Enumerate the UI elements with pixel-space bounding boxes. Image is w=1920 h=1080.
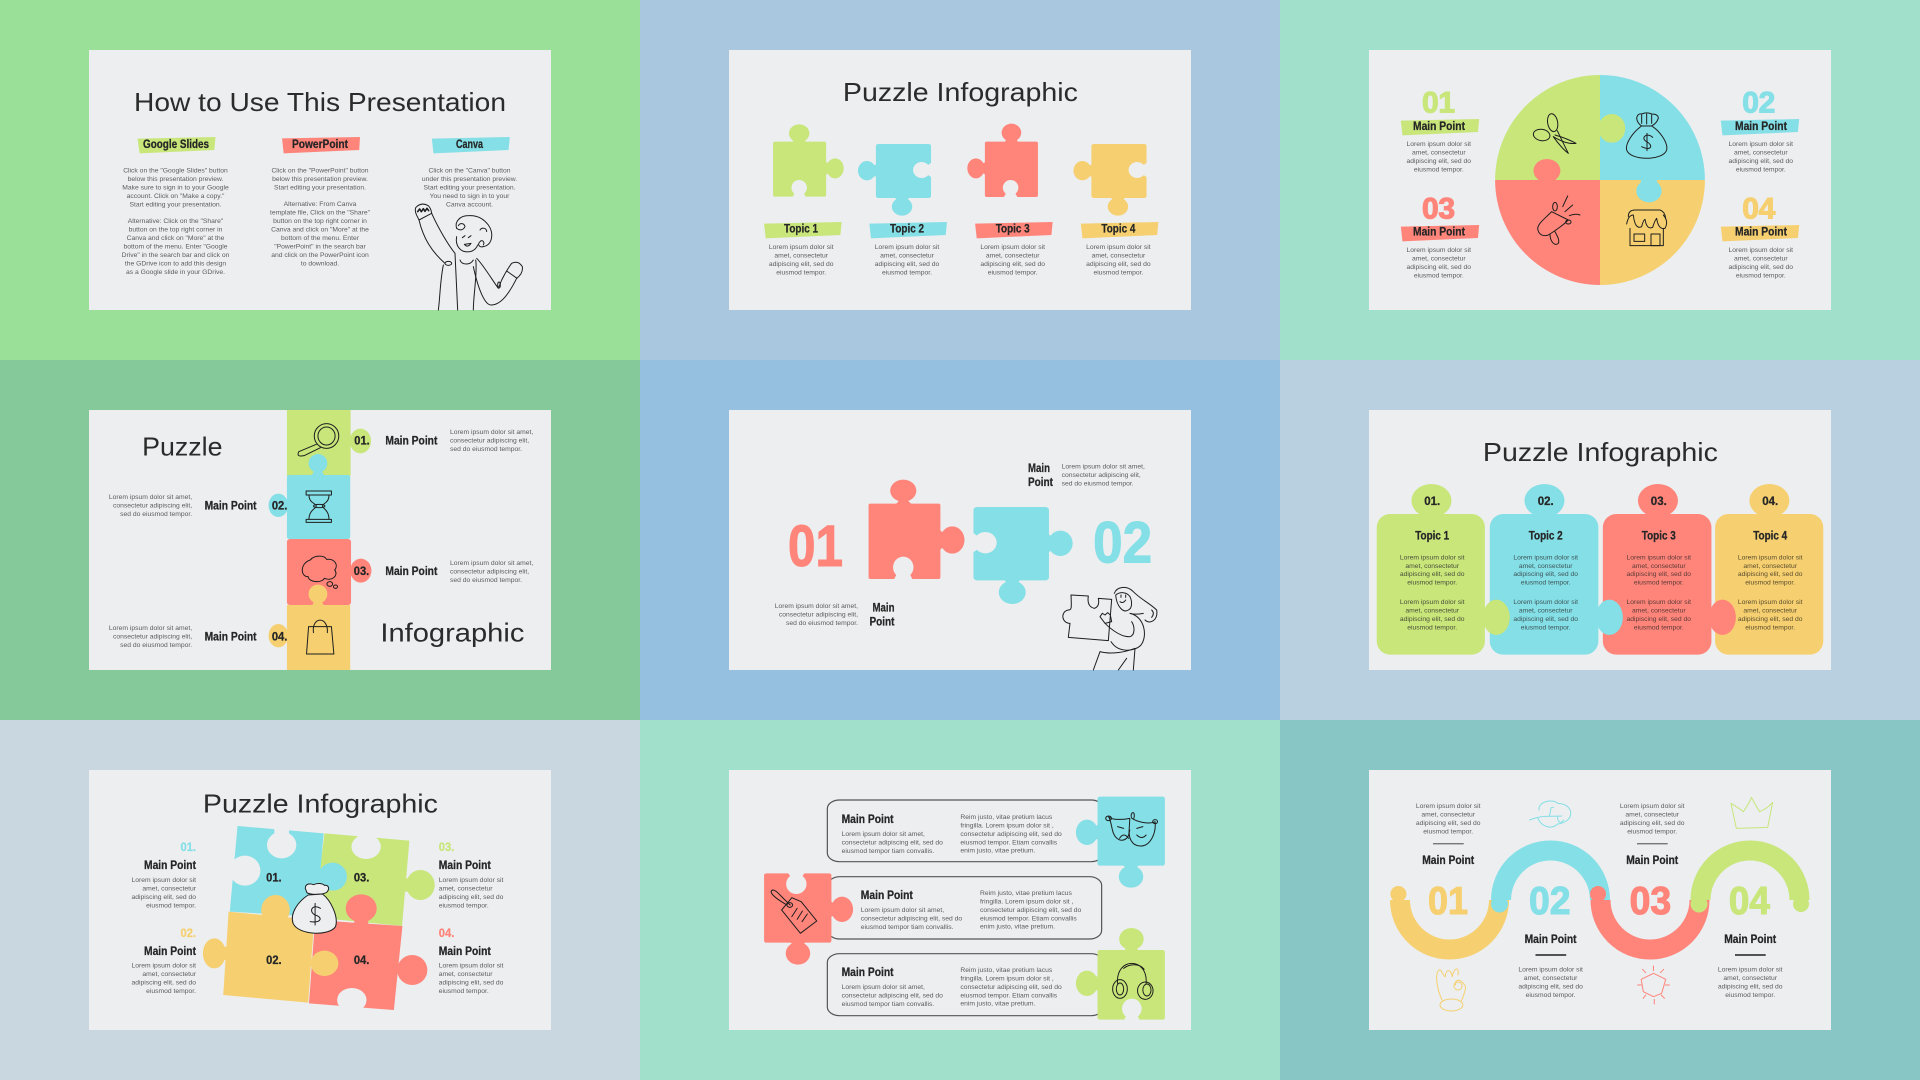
text: card 2: Lorem ipsum dolor sit bbox=[1513, 599, 1578, 606]
text: row 3 left: Lorem ipsum dolor sit amet, bbox=[842, 984, 925, 991]
text: point 3: amet, consectetur bbox=[1625, 811, 1680, 818]
text: right top: amet, consectetur bbox=[439, 886, 493, 893]
text: left top: Lorem ipsum dolor sit bbox=[131, 877, 196, 884]
text: card 1: adipiscing elit, sed do bbox=[1400, 616, 1465, 623]
text: powerpoint instructions: button on the top right corner in bbox=[273, 218, 367, 225]
label: main point 2: Main Point bbox=[205, 500, 257, 512]
text: point 4: eiusmod tempor. bbox=[1736, 273, 1786, 280]
text: card 4: amet, consectetur bbox=[1743, 563, 1798, 570]
label: main point row 3: Main Point bbox=[842, 967, 894, 979]
label: main point right top: Main Point bbox=[439, 860, 491, 872]
outlined cards with puzzle pieces bbox=[764, 797, 1165, 1020]
text: row 2 right: eiusmod tempor. Etiam convallis bbox=[980, 915, 1077, 922]
text: point 2: consectetur adipiscing elit, bbox=[113, 503, 192, 510]
text: google slides instructions: Click on the "Google Slides" button bbox=[123, 168, 228, 174]
text: point 1: amet, consectetur bbox=[1412, 150, 1466, 157]
number 03: 03 bbox=[1630, 880, 1671, 923]
text: card 4: eiusmod tempor. bbox=[1745, 580, 1795, 587]
text: left bottom: amet, consectetur bbox=[142, 971, 197, 978]
text: right top: eiusmod tempor. bbox=[439, 903, 489, 910]
text: point 4: Lorem ipsum dolor sit bbox=[1718, 966, 1783, 974]
label: main point right bottom: Main Point bbox=[439, 946, 491, 958]
label: google slides: Google Slides bbox=[143, 139, 209, 151]
text: card 1: Lorem ipsum dolor sit bbox=[1400, 554, 1465, 562]
text: google slides instructions: button on the top right corner in bbox=[129, 227, 223, 234]
text: bottom: consectetur adipiscing elit, bbox=[779, 611, 858, 618]
text: point 1: consectetur adipiscing elit, bbox=[450, 437, 529, 444]
text: google slides instructions: below this presentation preview. bbox=[128, 176, 223, 183]
label: topic 4: Topic 4 bbox=[1101, 224, 1136, 236]
text: card 4: amet, consectetur bbox=[1743, 608, 1798, 615]
text: point 2: sed do eiusmod tempor. bbox=[120, 511, 192, 518]
panel: four puzzle pieces topics bbox=[640, 0, 1280, 360]
vertical puzzle with icons bbox=[269, 410, 371, 670]
number 01: 01 bbox=[1428, 880, 1468, 923]
text: card 2: Lorem ipsum dolor sit bbox=[1513, 554, 1578, 562]
label: piece 02.: 02. bbox=[266, 955, 282, 967]
text: point 2: Lorem ipsum dolor sit bbox=[1518, 966, 1583, 974]
text: topic 1: eiusmod tempor. bbox=[776, 269, 826, 276]
text: row 2 left: eiusmod tempor tiam convallis. bbox=[861, 924, 954, 931]
title: Puzzle Infographic bbox=[203, 789, 438, 819]
text: card 1: eiusmod tempor. bbox=[1407, 580, 1457, 587]
panel: outlined rows bbox=[640, 720, 1280, 1080]
text: right bottom: Lorem ipsum dolor sit bbox=[439, 962, 503, 970]
label: main point 4: Main Point bbox=[1735, 226, 1787, 238]
panel: tilted jigsaw bbox=[0, 720, 640, 1080]
label: main point row 1: Main Point bbox=[842, 814, 894, 826]
text: row 2 right: consectetur adipiscing elit, sed do bbox=[980, 907, 1082, 914]
text: topic 4: adipiscing elit, sed do bbox=[1086, 261, 1151, 268]
label: topic 4: Topic 4 bbox=[1753, 530, 1788, 542]
cards bbox=[1377, 484, 1823, 655]
text: card 2: adipiscing elit, sed do bbox=[1513, 571, 1578, 578]
text: point 1: amet, consectetur bbox=[1421, 811, 1476, 818]
number: left 02.: 02. bbox=[180, 928, 196, 940]
text: point 3: adipiscing elit, sed do bbox=[1407, 264, 1471, 271]
text: point 3: eiusmod tempor. bbox=[1627, 828, 1677, 835]
text: google slides instructions: account. Click on "Make a copy." bbox=[127, 193, 225, 200]
title: infographic: Infographic bbox=[380, 618, 524, 648]
text: point 3: sed do eiusmod tempor. bbox=[450, 577, 522, 584]
label: main point bottom: Main bbox=[872, 602, 894, 614]
text: card 4: adipiscing elit, sed do bbox=[1738, 571, 1803, 578]
number 02.: 02. bbox=[1538, 496, 1554, 508]
number: right 03.: 03. bbox=[439, 842, 454, 854]
text: point 2: adipiscing elit, sed do bbox=[1729, 158, 1793, 165]
text: card 4: adipiscing elit, sed do bbox=[1738, 616, 1803, 623]
text: card 1: amet, consectetur bbox=[1405, 608, 1460, 615]
title: Puzzle Infographic bbox=[1483, 437, 1718, 467]
text: left top: eiusmod tempor. bbox=[146, 903, 196, 910]
text: canva instructions: Canva account. bbox=[446, 201, 493, 208]
label: piece 04.: 04. bbox=[354, 955, 369, 967]
text: canva instructions: under this presentation preview. bbox=[422, 176, 517, 183]
number: right 04.: 04. bbox=[439, 928, 454, 940]
label: main point 4: Main Point bbox=[1724, 934, 1776, 946]
text: bottom: Lorem ipsum dolor sit amet, bbox=[775, 603, 858, 610]
label: main point 1: Main Point bbox=[385, 436, 438, 448]
text: point 1: eiusmod tempor. bbox=[1423, 828, 1473, 835]
text: google slides instructions: Canva and click on "More" at the bbox=[127, 235, 225, 242]
number 04: 04 bbox=[1729, 880, 1770, 923]
text: card 3: eiusmod tempor. bbox=[1634, 624, 1684, 631]
label: piece 03.: 03. bbox=[354, 872, 369, 884]
text: row 1 right: enim justo, vitae pretium. bbox=[960, 848, 1036, 855]
text: point 2: Lorem ipsum dolor sit amet, bbox=[109, 494, 192, 501]
text: point 3: Lorem ipsum dolor sit bbox=[1620, 803, 1685, 810]
text: row 1 left: eiusmod tempor tiam convallis. bbox=[842, 848, 934, 855]
text: card 2: eiusmod tempor. bbox=[1521, 580, 1571, 587]
number 04.: 04. bbox=[1762, 496, 1778, 508]
text: point 3: eiusmod tempor. bbox=[1414, 273, 1464, 280]
label: main point row 2: Main Point bbox=[861, 890, 913, 902]
text: card 1: eiusmod tempor. bbox=[1407, 624, 1457, 631]
text: point 3: Lorem ipsum dolor sit bbox=[1407, 247, 1471, 254]
title: puzzle: Puzzle bbox=[142, 432, 222, 462]
text: point 2: eiusmod tempor. bbox=[1526, 992, 1576, 999]
text: row 1 left: consectetur adipiscing elit, sed do bbox=[842, 839, 943, 846]
illustration: person carrying puzzle piece bbox=[1063, 587, 1157, 670]
text: row 1 right: Reim justo, vitae pretium lacus bbox=[960, 814, 1053, 821]
text: google slides instructions: as a Google slide in your GDrive. bbox=[126, 269, 225, 276]
label: main point bottom: Point bbox=[870, 616, 895, 628]
number 02: 02 bbox=[1742, 87, 1775, 120]
text: topic 3: amet, consectetur bbox=[986, 252, 1040, 259]
text: topic 1: adipiscing elit, sed do bbox=[769, 261, 834, 268]
panel: circular puzzle bbox=[1280, 0, 1920, 360]
text: google slides instructions: Make sure to sign in to your Google bbox=[122, 184, 229, 191]
label: topic 2: Topic 2 bbox=[1529, 530, 1563, 542]
text: row 3 right: enim justo, vitae pretium. bbox=[960, 1001, 1036, 1008]
text: topic 2: Lorem ipsum dolor sit bbox=[875, 244, 939, 251]
text: card 4: eiusmod tempor. bbox=[1745, 624, 1795, 631]
text: left bottom: Lorem ipsum dolor sit bbox=[131, 962, 196, 970]
text: powerpoint instructions: Click on the "PowerPoint" button bbox=[271, 168, 369, 174]
text: right bottom: adipiscing elit, sed do bbox=[439, 979, 504, 986]
text: point 3: adipiscing elit, sed do bbox=[1620, 820, 1685, 827]
panel: two connecting pieces bbox=[640, 360, 1280, 720]
text: point 2: amet, consectetur bbox=[1734, 150, 1788, 157]
label: main point top: Point bbox=[1028, 477, 1053, 489]
text: point 2: amet, consectetur bbox=[1524, 975, 1578, 982]
text: point 4: amet, consectetur bbox=[1723, 975, 1778, 982]
label: main point 1: Main Point bbox=[1422, 855, 1474, 867]
text: card 4: Lorem ipsum dolor sit bbox=[1738, 554, 1803, 562]
text: card 3: amet, consectetur bbox=[1632, 563, 1686, 570]
text: powerpoint instructions: below this presentation preview. bbox=[272, 176, 368, 183]
number 04.: 04. bbox=[272, 632, 287, 644]
text: topic 3: eiusmod tempor. bbox=[988, 269, 1038, 276]
text: row 3 right: eiusmod tempor. Etiam convallis bbox=[960, 992, 1058, 999]
text: left bottom: adipiscing elit, sed do bbox=[131, 979, 196, 986]
text: card 3: amet, consectetur bbox=[1632, 608, 1686, 615]
panel: four rounded puzzle cards bbox=[1280, 360, 1920, 720]
text: point 4: Lorem ipsum dolor sit amet, bbox=[109, 625, 192, 632]
text: row 3 left: consectetur adipiscing elit, sed do bbox=[842, 992, 943, 999]
text: point 1: Lorem ipsum dolor sit bbox=[1407, 141, 1471, 148]
label: main point top: Main bbox=[1028, 463, 1050, 475]
text: topic 4: amet, consectetur bbox=[1092, 252, 1146, 259]
text: topic 4: eiusmod tempor. bbox=[1093, 269, 1143, 276]
text: point 2: eiusmod tempor. bbox=[1736, 167, 1786, 174]
text: point 3: consectetur adipiscing elit, bbox=[450, 568, 529, 575]
text: row 1 right: fringilla. Lorem ipsum dolor sit , bbox=[960, 822, 1054, 829]
text: card 4: Lorem ipsum dolor sit bbox=[1738, 599, 1803, 606]
text: card 3: Lorem ipsum dolor sit bbox=[1627, 554, 1691, 562]
text: card 1: Lorem ipsum dolor sit bbox=[1400, 599, 1465, 606]
arc connector knobs bbox=[1390, 886, 1809, 912]
text: row 2 left: Lorem ipsum dolor sit amet, bbox=[861, 907, 944, 914]
text: row 2 right: Reim justo, vitae pretium lacus bbox=[980, 890, 1073, 897]
text: card 1: adipiscing elit, sed do bbox=[1400, 571, 1465, 578]
text: point 1: Lorem ipsum dolor sit bbox=[1416, 803, 1481, 810]
text: google slides instructions: Alternative: Click on the "Share" bbox=[128, 218, 224, 225]
text: point 4: amet, consectetur bbox=[1734, 256, 1788, 263]
text: point 3: Lorem ipsum dolor sit amet, bbox=[450, 560, 533, 567]
text: top: consectetur adipiscing elit, bbox=[1062, 472, 1141, 479]
text: row 1 right: eiusmod tempor. Etiam convallis bbox=[960, 839, 1058, 846]
text: card 1: amet, consectetur bbox=[1405, 563, 1460, 570]
title: how to use: How to Use This Presentation bbox=[134, 87, 506, 117]
text: point 4: adipiscing elit, sed do bbox=[1729, 264, 1793, 271]
text: top: sed do eiusmod tempor. bbox=[1062, 480, 1134, 487]
number 01: 01 bbox=[788, 514, 843, 579]
text: topic 4: Lorem ipsum dolor sit bbox=[1086, 244, 1151, 251]
text: canva instructions: Click on the "Canva" button bbox=[428, 168, 511, 174]
panel: how to use this presentation bbox=[0, 0, 640, 360]
text: point 2: Lorem ipsum dolor sit bbox=[1729, 141, 1793, 148]
text: top: Lorem ipsum dolor sit amet, bbox=[1062, 464, 1145, 470]
illustration: waving person bbox=[415, 204, 522, 310]
text: card 2: amet, consectetur bbox=[1519, 608, 1573, 615]
text: row 3 right: consectetur adipiscing elit, sed do bbox=[960, 984, 1062, 991]
text: row 2 right: enim justo, vitae pretium. bbox=[980, 924, 1055, 931]
icons: scissors, money bag, megaphone, shop bbox=[1532, 113, 1667, 246]
label: main point 1: Main Point bbox=[1413, 121, 1465, 133]
label: main point 3: Main Point bbox=[1413, 226, 1465, 238]
text: topic 2: eiusmod tempor. bbox=[882, 269, 932, 276]
text: point 1: sed do eiusmod tempor. bbox=[450, 446, 522, 453]
text: powerpoint instructions: "PowerPoint" in the search bar bbox=[274, 243, 366, 250]
text: point 1: adipiscing elit, sed do bbox=[1407, 158, 1471, 165]
text: powerpoint instructions: Canva and click on "More" at the bbox=[271, 227, 369, 234]
label: main point 3: Main Point bbox=[1626, 855, 1678, 867]
text: right bottom: eiusmod tempor. bbox=[439, 988, 489, 995]
text: row 3 left: eiusmod tempor tiam convallis. bbox=[842, 1001, 934, 1008]
text: left top: amet, consectetur bbox=[142, 886, 197, 893]
text: right top: adipiscing elit, sed do bbox=[439, 894, 504, 901]
text: powerpoint instructions: to download. bbox=[301, 260, 339, 267]
wave arcs bbox=[1400, 850, 1800, 950]
text: powerpoint instructions: bottom of the menu. Enter bbox=[281, 235, 360, 242]
text: powerpoint instructions: Start editing your presentation. bbox=[274, 184, 366, 191]
text: right bottom: amet, consectetur bbox=[439, 971, 493, 978]
text: point 1: adipiscing elit, sed do bbox=[1416, 820, 1481, 827]
label: topic 1: Topic 1 bbox=[1415, 530, 1450, 542]
puzzle pieces bbox=[764, 124, 1158, 238]
text: topic 2: adipiscing elit, sed do bbox=[875, 261, 940, 268]
text: google slides instructions: the GDrive icon to add this design bbox=[125, 260, 226, 267]
label: main point left bottom: Main Point bbox=[144, 946, 196, 958]
text: point 2: adipiscing elit, sed do bbox=[1518, 983, 1583, 990]
label: main point left top: Main Point bbox=[144, 860, 196, 872]
panel: wave timeline bbox=[1280, 720, 1920, 1080]
text: point 4: sed do eiusmod tempor. bbox=[120, 642, 192, 649]
jigsaw pieces bbox=[203, 826, 435, 1013]
text: left top: adipiscing elit, sed do bbox=[131, 894, 196, 901]
text: point 4: adipiscing elit, sed do bbox=[1718, 983, 1783, 990]
number 03.: 03. bbox=[1651, 496, 1667, 508]
text: powerpoint instructions: and click on the PowerPoint icon bbox=[271, 252, 369, 259]
text: card 3: eiusmod tempor. bbox=[1634, 580, 1684, 587]
text: point 1: Lorem ipsum dolor sit amet, bbox=[450, 429, 533, 436]
text: canva instructions: Start editing your presentation. bbox=[424, 184, 516, 191]
icons bbox=[1437, 797, 1773, 1011]
text: powerpoint instructions: template file, Click on the "Share" bbox=[270, 210, 371, 217]
label: piece 01.: 01. bbox=[266, 872, 282, 884]
label: topic 3: Topic 3 bbox=[1642, 530, 1676, 542]
label: main point 3: Main Point bbox=[385, 566, 438, 578]
label: canva: Canva bbox=[456, 139, 483, 151]
label: main point 2: Main Point bbox=[1735, 121, 1787, 133]
text: topic 2: amet, consectetur bbox=[880, 252, 935, 259]
text: card 2: amet, consectetur bbox=[1519, 563, 1573, 570]
text: canva instructions: You need to sign in to your bbox=[430, 193, 510, 200]
number 02.: 02. bbox=[272, 500, 287, 512]
label: topic 1: Topic 1 bbox=[784, 224, 819, 236]
text: google slides instructions: Start editing your presentation. bbox=[130, 201, 222, 208]
number 01.: 01. bbox=[354, 436, 370, 448]
label: topic 2: Topic 2 bbox=[890, 224, 924, 236]
number 02: 02 bbox=[1529, 880, 1571, 923]
text: row 3 right: fringilla. Lorem ipsum dolor sit , bbox=[960, 975, 1054, 982]
text: google slides instructions: bottom of the menu. Enter "Google bbox=[123, 244, 228, 251]
text: point 4: Lorem ipsum dolor sit bbox=[1729, 247, 1793, 254]
label: main point 2: Main Point bbox=[1525, 934, 1577, 946]
text: row 2 right: fringilla. Lorem ipsum dolor sit , bbox=[980, 898, 1074, 905]
text: card 3: adipiscing elit, sed do bbox=[1627, 571, 1691, 578]
text: powerpoint instructions: Alternative: From Canva bbox=[284, 201, 357, 208]
text: topic 1: amet, consectetur bbox=[774, 252, 829, 259]
number 01.: 01. bbox=[1424, 496, 1440, 508]
text: row 1 left: Lorem ipsum dolor sit amet, bbox=[842, 831, 925, 838]
label: topic 3: Topic 3 bbox=[996, 224, 1030, 236]
title: Puzzle Infographic bbox=[843, 77, 1078, 107]
text: point 4: consectetur adipiscing elit, bbox=[113, 634, 192, 641]
number: left 01.: 01. bbox=[180, 842, 196, 854]
text: bottom: sed do eiusmod tempor. bbox=[786, 620, 858, 627]
label: powerpoint: PowerPoint bbox=[292, 139, 348, 151]
text: card 2: eiusmod tempor. bbox=[1521, 624, 1571, 631]
text: point 1: eiusmod tempor. bbox=[1414, 167, 1464, 174]
number 03: 03 bbox=[1422, 193, 1455, 226]
text: card 3: Lorem ipsum dolor sit bbox=[1627, 599, 1691, 606]
label brushes bbox=[138, 137, 510, 153]
text: topic 1: Lorem ipsum dolor sit bbox=[769, 244, 834, 251]
text: topic 3: Lorem ipsum dolor sit bbox=[980, 244, 1045, 251]
text: right top: Lorem ipsum dolor sit bbox=[439, 877, 503, 884]
text: row 2 left: consectetur adipiscing elit, sed do bbox=[861, 915, 962, 922]
chart: puzzle circle bbox=[1401, 75, 1799, 285]
number 02: 02 bbox=[1093, 511, 1152, 576]
number 03.: 03. bbox=[354, 566, 369, 578]
text: left bottom: eiusmod tempor. bbox=[146, 988, 196, 995]
text: card 3: adipiscing elit, sed do bbox=[1627, 616, 1691, 623]
number 04: 04 bbox=[1742, 193, 1776, 226]
number 01: 01 bbox=[1422, 87, 1455, 120]
panel: vertical puzzle column bbox=[0, 360, 640, 720]
text: row 1 right: consectetur adipiscing elit, sed do bbox=[960, 831, 1062, 838]
text: point 4: eiusmod tempor. bbox=[1725, 992, 1775, 999]
text: topic 3: adipiscing elit, sed do bbox=[980, 261, 1045, 268]
text: card 2: adipiscing elit, sed do bbox=[1513, 616, 1578, 623]
text: row 3 right: Reim justo, vitae pretium lacus bbox=[960, 967, 1053, 974]
text: point 3: amet, consectetur bbox=[1412, 256, 1466, 263]
two puzzle pieces bbox=[869, 480, 1073, 604]
label: main point 4: Main Point bbox=[205, 632, 257, 644]
text: google slides instructions: Drive" in the search bar and click on bbox=[122, 252, 230, 259]
